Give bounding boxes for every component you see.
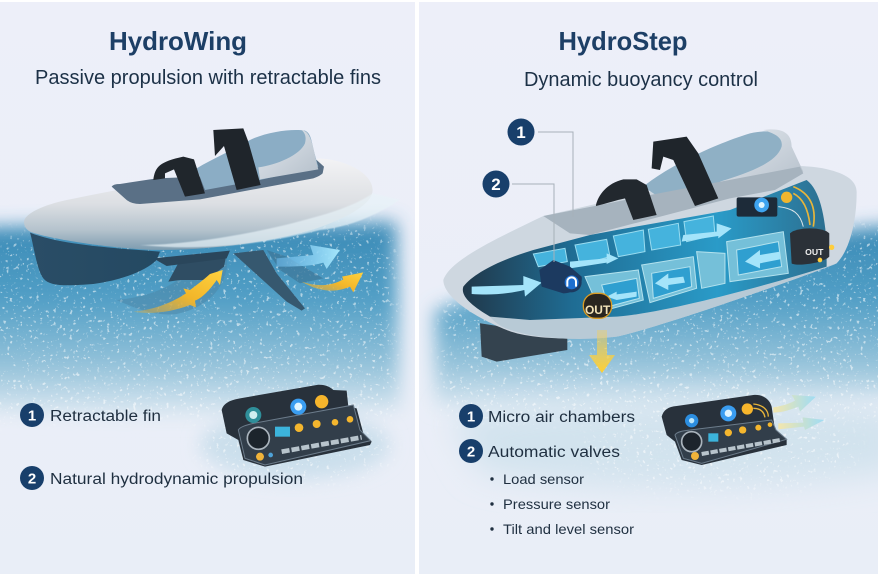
flow arrows xyxy=(472,223,780,300)
outlet valve: OUT xyxy=(585,303,611,317)
hull xyxy=(30,233,160,285)
arrow: blue xyxy=(277,245,340,269)
inlet valve xyxy=(539,260,582,293)
illustration: HydroWing board xyxy=(24,128,400,314)
badge 2 left xyxy=(20,466,44,490)
panel background left xyxy=(0,2,415,574)
strap back xyxy=(213,128,261,190)
title HydroStep: HydroStep xyxy=(558,26,688,56)
badge 2 left: 2 xyxy=(28,470,36,488)
fins xyxy=(117,250,323,314)
water surface left xyxy=(0,200,415,500)
callout badge 1 xyxy=(508,118,534,146)
callout badge 2: 2 xyxy=(491,175,501,194)
pedestal xyxy=(480,323,567,362)
air chambers xyxy=(533,216,715,267)
callout badge 1: 1 xyxy=(516,123,526,142)
badge 1 left xyxy=(20,403,44,427)
sensor list: Load sensor xyxy=(503,471,584,487)
badge 1 left: 1 xyxy=(28,408,36,424)
shell foam xyxy=(490,263,837,339)
badge 1 right xyxy=(459,404,483,428)
top sensor unit xyxy=(737,187,814,227)
sensor list xyxy=(490,471,634,537)
sandal footbed xyxy=(643,131,784,200)
badge 2 right xyxy=(459,439,483,463)
panel background right xyxy=(419,2,878,574)
outlet valve xyxy=(583,293,612,318)
strap front xyxy=(596,179,657,220)
subtitle right: Dynamic buoyancy control xyxy=(524,69,758,91)
arrow: gold lower xyxy=(133,270,223,313)
float body xyxy=(24,158,373,250)
sensor list: Pressure sensor xyxy=(503,496,610,512)
panel: HydroStep xyxy=(419,2,878,574)
foam on float edge xyxy=(140,193,400,247)
label Micro air chambers: Micro air chambers xyxy=(488,409,635,426)
sandal footbed xyxy=(197,130,318,190)
label Retractable fin: Retractable fin xyxy=(50,408,161,425)
sandal heel wall xyxy=(720,129,803,188)
rear out valve xyxy=(790,228,834,265)
cutaway cavity xyxy=(463,180,827,320)
sandal plate xyxy=(543,167,803,235)
sandal heel wall xyxy=(258,130,318,179)
arrow: yellow down xyxy=(589,330,615,373)
label Natural hydrodynamic propulsion: Natural hydrodynamic propulsion xyxy=(50,471,303,488)
water surface right xyxy=(419,200,878,500)
label Automatic valves: Automatic valves xyxy=(488,444,620,461)
float shell xyxy=(443,166,857,339)
badge 2 right: 2 xyxy=(467,444,475,460)
callout line 1 xyxy=(538,132,573,217)
illustration: HydroStep cutaway xyxy=(443,129,857,362)
panel: HydroWing xyxy=(0,2,415,574)
rear out valve: OUT xyxy=(805,247,824,257)
strap back xyxy=(652,137,718,206)
title HydroWing: HydroWing xyxy=(109,26,247,56)
arrows: module outflow xyxy=(773,395,824,430)
callout line 2 xyxy=(512,184,554,262)
subtitle left: Passive propulsion with retractable fins xyxy=(35,67,381,89)
control module right xyxy=(662,395,787,465)
strap front xyxy=(153,157,205,197)
callout badge 2 xyxy=(482,170,510,198)
sensor list: Tilt and level sensor xyxy=(503,521,634,537)
badge 1 right: 1 xyxy=(467,408,475,426)
sandal plate xyxy=(112,160,324,204)
control module left xyxy=(222,385,372,467)
arrow: gold upper right xyxy=(302,272,363,292)
lower blocks xyxy=(585,232,788,310)
